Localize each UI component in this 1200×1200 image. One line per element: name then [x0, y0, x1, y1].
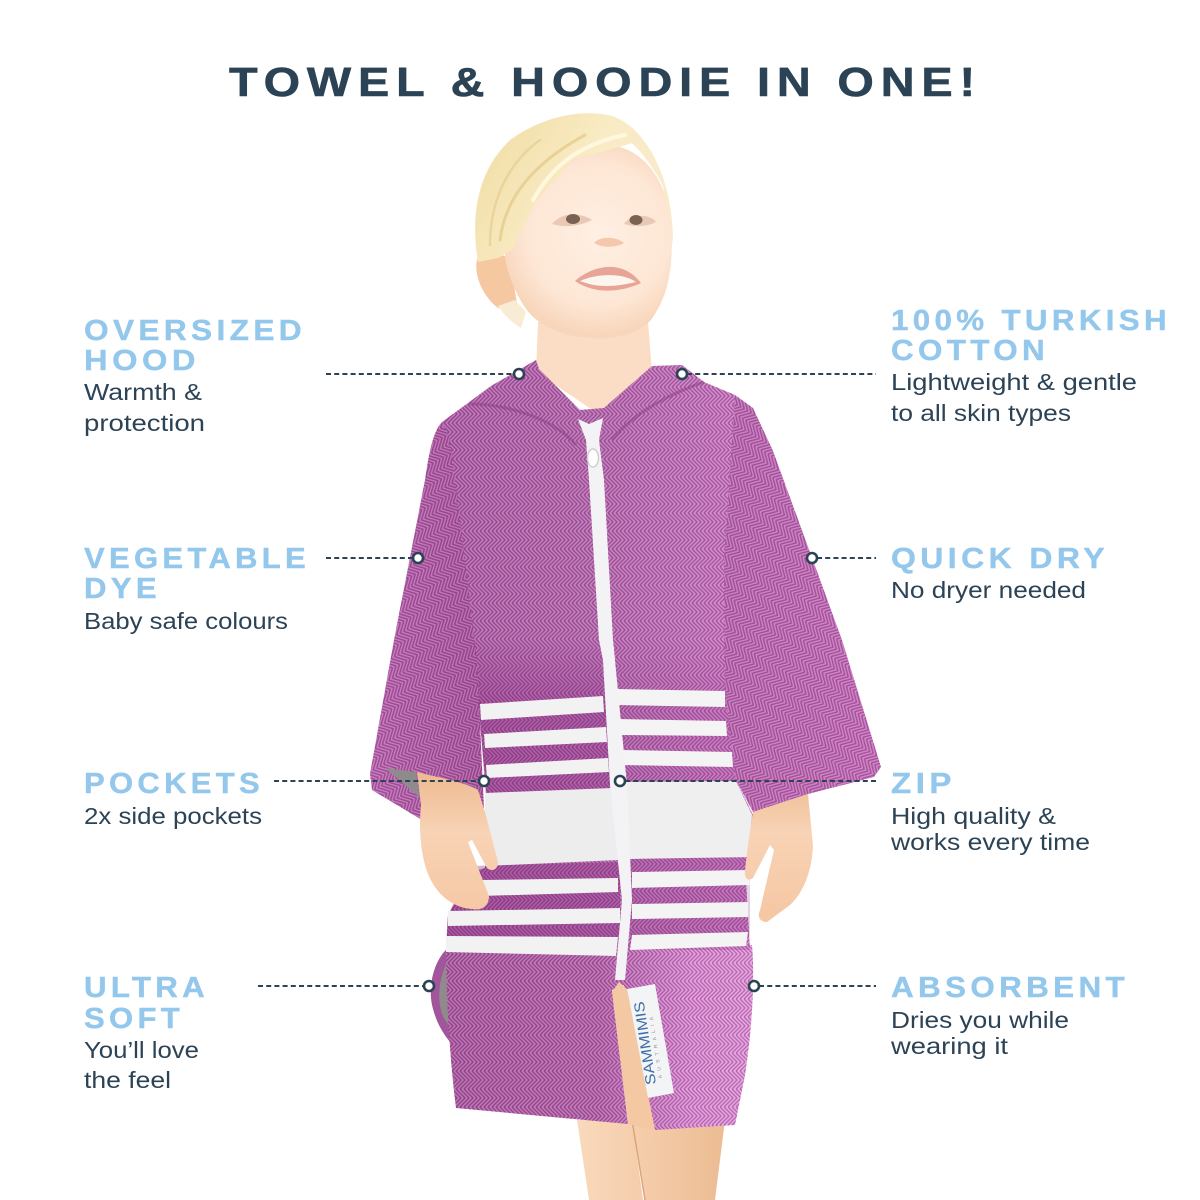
ultra soft heading: ULTRA	[84, 972, 209, 1004]
oversized hood heading: OVERSIZED	[84, 315, 306, 347]
child wearing hooded towel	[370, 113, 881, 1200]
title: TOWEL & HOODIE IN ONE!	[229, 59, 982, 105]
quick dry leader	[807, 553, 876, 563]
ultra soft leader	[258, 981, 434, 991]
oversized hood heading	[84, 315, 306, 377]
back lining of robe	[431, 948, 450, 1042]
turkish cotton leader	[677, 369, 876, 379]
ultra soft description	[84, 1037, 199, 1093]
oversized hood heading: HOOD	[84, 345, 200, 377]
zip	[578, 418, 632, 980]
callout: oversized hood	[84, 315, 524, 436]
callout: zip	[615, 768, 1090, 855]
callout: absorbent	[749, 972, 1129, 1059]
vegetable dye heading: DYE	[84, 573, 161, 605]
garment tag: AUSTRALIA	[649, 1016, 664, 1079]
right sleeve	[724, 395, 881, 812]
absorbent heading: ABSORBENT	[891, 972, 1129, 1004]
oversized hood leader	[326, 369, 524, 379]
hair	[475, 113, 673, 262]
oversized hood description: protection	[84, 410, 205, 436]
garment tag: SAMMIMIS	[632, 1000, 660, 1086]
legs	[577, 1120, 725, 1200]
garment tag	[627, 984, 674, 1098]
turkish cotton heading: 100% TURKISH	[891, 305, 1171, 337]
callout: ultra soft	[84, 972, 434, 1093]
turkish cotton description: Lightweight & gentle	[891, 369, 1137, 395]
absorbent description: Dries you while	[891, 1007, 1069, 1033]
left eye	[552, 214, 592, 226]
pockets description: 2x side pockets	[84, 803, 262, 829]
white stripes right	[616, 689, 752, 950]
zip description: High quality &	[891, 803, 1056, 829]
oversized hood description: Warmth &	[84, 379, 202, 405]
white stripes left	[446, 696, 620, 956]
right hand	[745, 794, 813, 922]
zip heading: ZIP	[891, 768, 956, 800]
turkish cotton description: to all skin types	[891, 400, 1071, 426]
callout: turkish cotton	[677, 305, 1171, 426]
ear	[476, 252, 518, 310]
zip description	[890, 803, 1090, 855]
left sleeve	[370, 422, 484, 820]
robe skirt	[446, 945, 753, 1130]
hair strands	[490, 135, 625, 245]
vegetable dye heading	[84, 543, 310, 605]
zip leader	[615, 776, 876, 786]
ultra soft description: You’ll love	[84, 1037, 199, 1063]
ultra soft heading: SOFT	[84, 1003, 184, 1035]
left hand	[417, 772, 498, 909]
vegetable dye leader	[326, 553, 423, 563]
quick dry heading: QUICK DRY	[891, 543, 1109, 575]
turkish cotton heading: COTTON	[891, 335, 1049, 367]
ultra soft heading	[84, 972, 209, 1035]
robe torso	[442, 360, 753, 950]
turkish cotton description	[891, 369, 1137, 426]
hair wisp	[498, 300, 526, 328]
absorbent description	[890, 1007, 1069, 1059]
nose	[594, 238, 624, 247]
face	[505, 145, 672, 338]
callout: vegetable dye	[84, 543, 423, 634]
zip description: works every time	[890, 829, 1090, 855]
oversized hood description	[84, 379, 205, 436]
neck	[536, 322, 652, 415]
quick dry description: No dryer needed	[891, 577, 1086, 603]
callout: quick dry	[807, 543, 1109, 603]
pockets heading: POCKETS	[84, 768, 264, 800]
pockets leader	[274, 776, 489, 786]
mouth	[575, 267, 641, 291]
hood folds	[470, 382, 704, 445]
vegetable dye description: Baby safe colours	[84, 608, 288, 634]
absorbent leader	[749, 981, 876, 991]
vegetable dye heading: VEGETABLE	[84, 543, 310, 575]
dark band behind stripes	[446, 640, 750, 945]
head	[475, 113, 673, 338]
absorbent description: wearing it	[890, 1033, 1009, 1059]
callout: pockets	[84, 768, 489, 829]
right eye	[624, 215, 656, 226]
ultra soft description: the feel	[84, 1067, 171, 1093]
skin showing through slit	[612, 982, 655, 1130]
turkish cotton heading	[891, 305, 1171, 367]
